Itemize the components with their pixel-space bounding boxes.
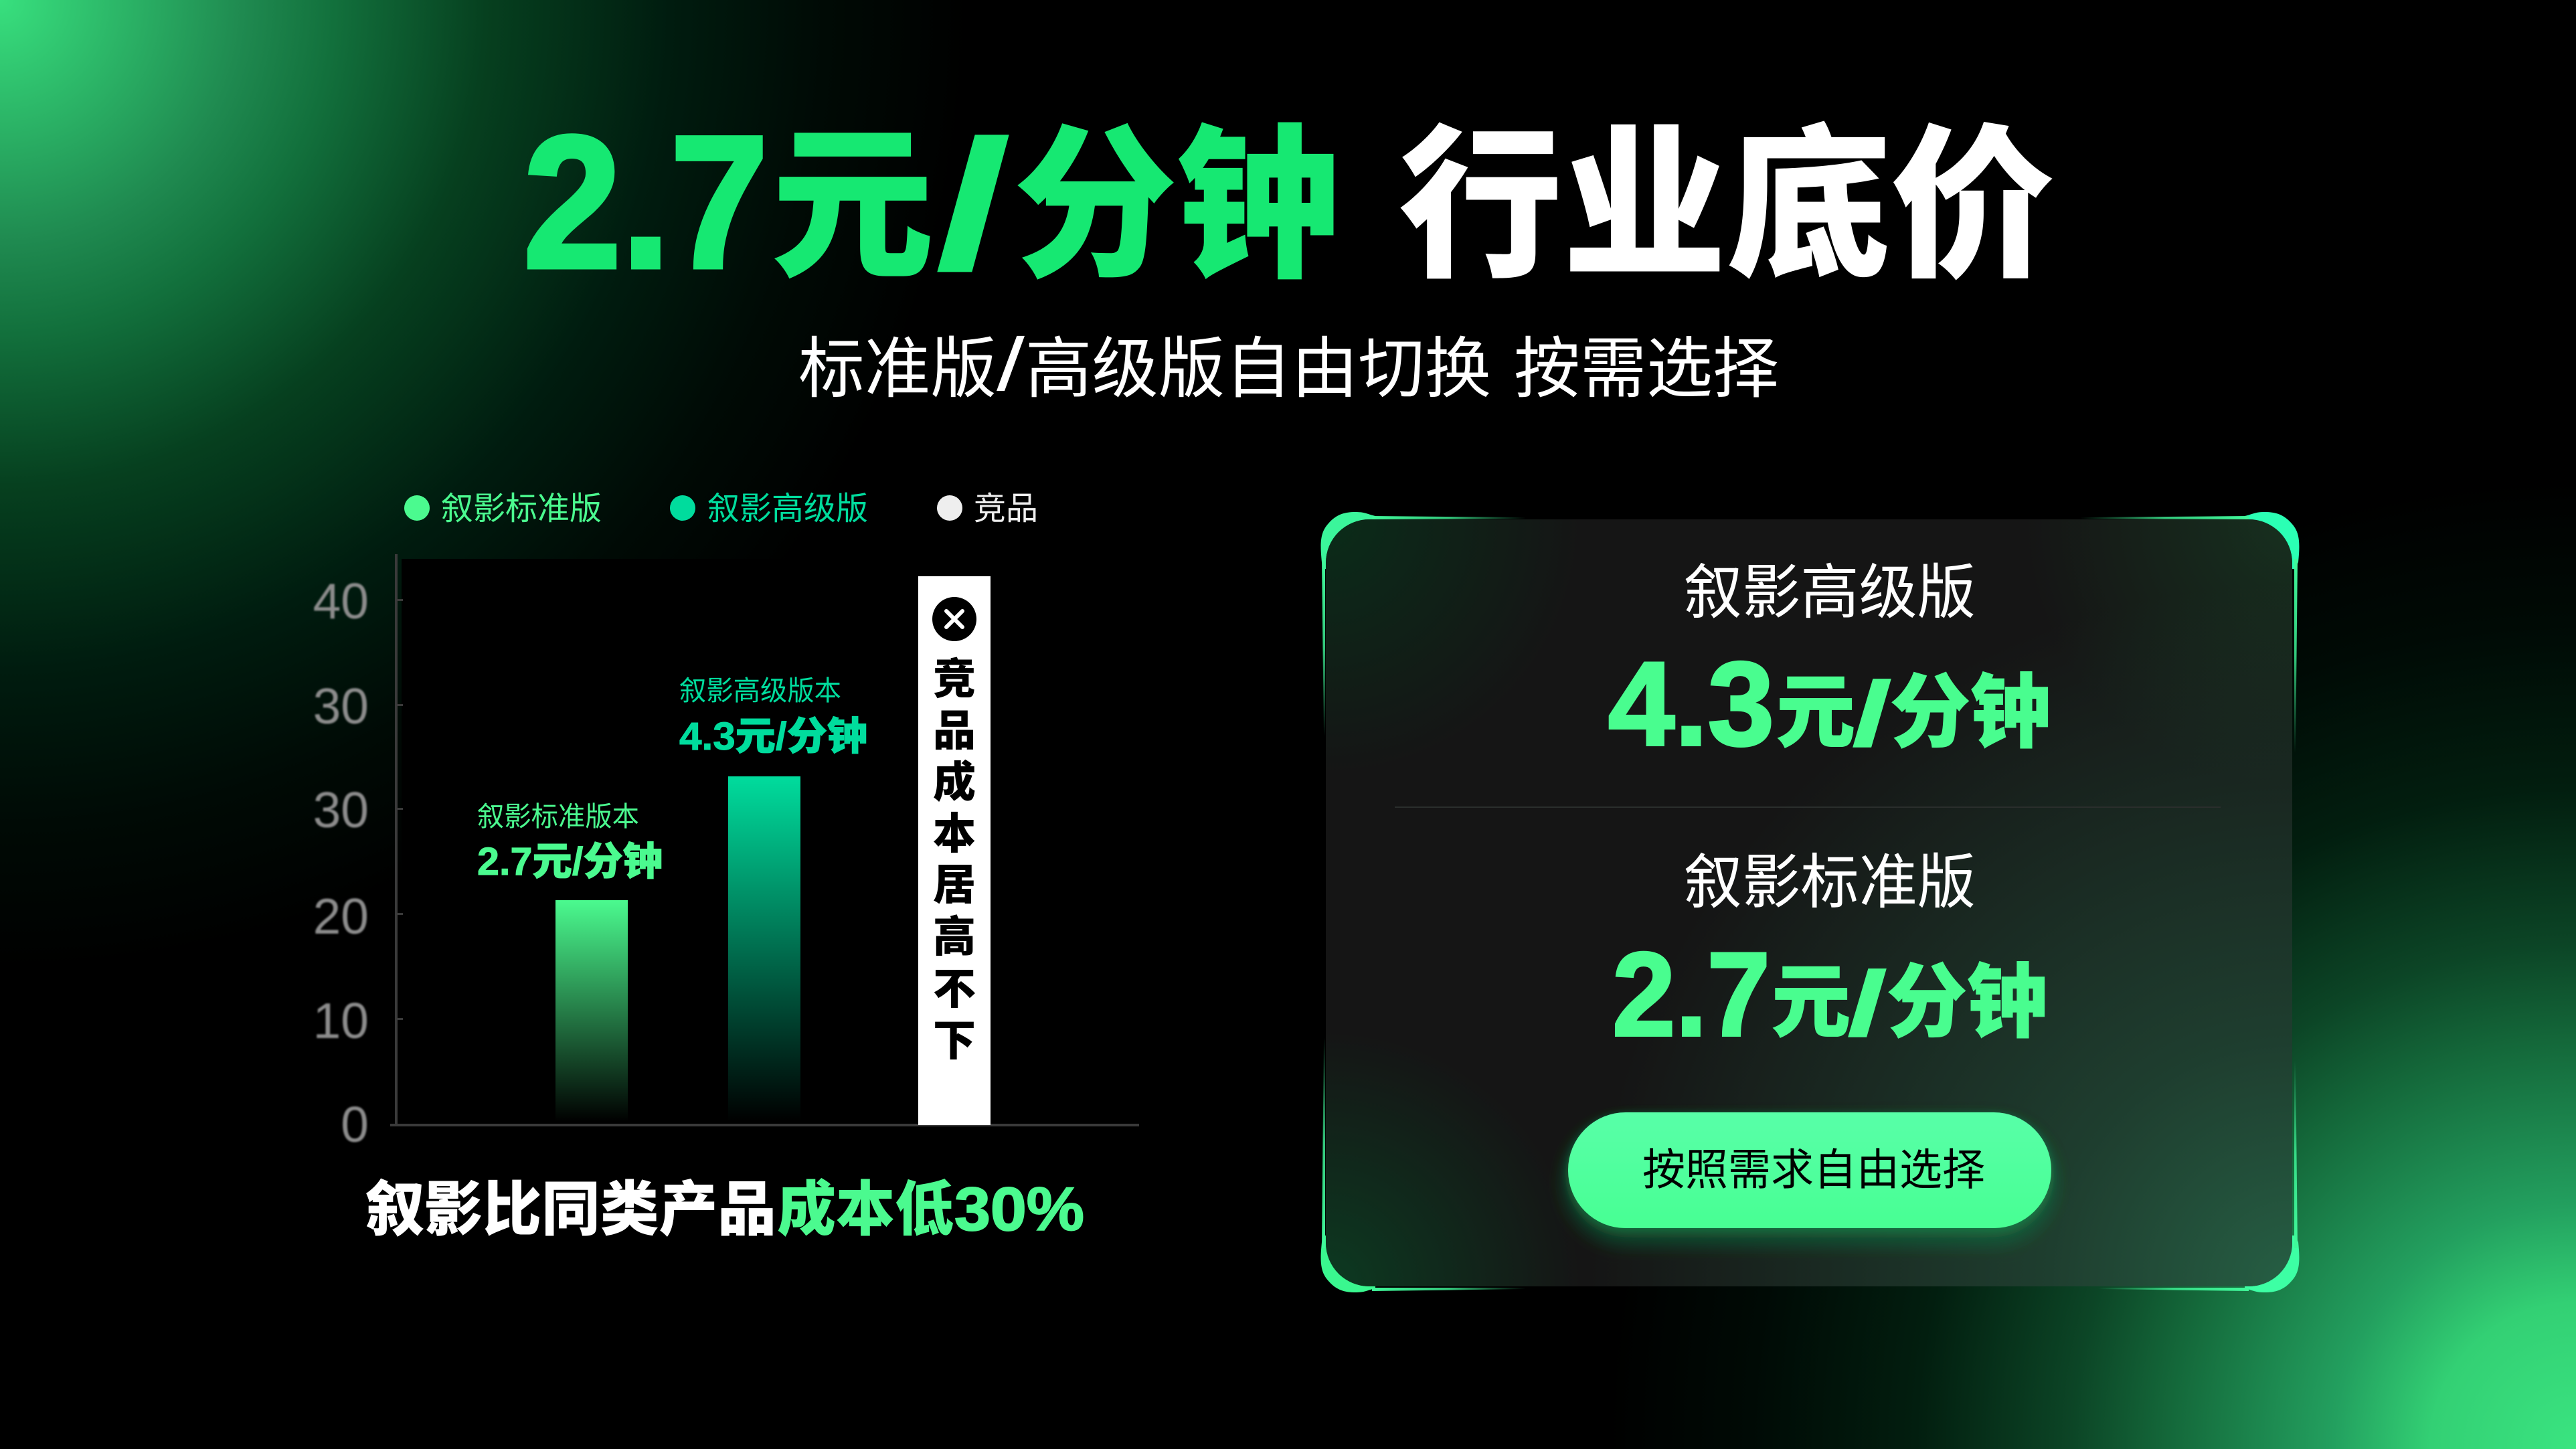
button: 按照需求自由选择 <box>1642 1145 1985 1194</box>
standard plan price: 2.7 <box>1612 928 1770 1061</box>
chart caption: 成本低 <box>777 1176 954 1243</box>
title: 分钟 <box>1014 114 1339 299</box>
bar: advanced <box>728 776 800 1122</box>
competitor vertical label: 竞 <box>933 655 976 703</box>
competitor vertical label: 下 <box>933 1017 976 1065</box>
divider <box>1395 806 2221 808</box>
legend item: standard: 叙影标准版 <box>441 491 602 527</box>
title: 元 <box>772 114 934 299</box>
advanced plan price: 4.3 <box>1608 637 1774 770</box>
bar: standard <box>555 900 628 1122</box>
card body <box>1326 519 2292 1286</box>
standard plan name: 叙影标准版 <box>1684 849 1976 916</box>
competitor vertical label <box>933 655 976 1065</box>
competitor vertical label: 高 <box>933 913 976 961</box>
standard plan price <box>1612 928 2047 1061</box>
y axis labels: 40 <box>313 573 369 629</box>
standard plan price: 元 <box>1772 958 1851 1047</box>
axes <box>390 554 1139 1126</box>
title: 2.7 <box>523 97 768 307</box>
chart caption: 30% <box>954 1175 1084 1244</box>
advanced plan name: 叙影高级版 <box>1684 559 1976 626</box>
chart caption: 叙影比同类产品 <box>365 1176 776 1243</box>
advanced plan price: 元 <box>1776 668 1855 758</box>
bar label: standard: 2.7元/分钟 <box>477 840 663 883</box>
bar label: standard <box>477 801 663 883</box>
subtitle: 高级版自由切换 <box>1025 331 1491 406</box>
competitor vertical label: 本 <box>933 810 976 858</box>
title <box>523 97 2055 307</box>
title: / <box>937 104 1010 306</box>
icon: x in circle <box>932 597 976 641</box>
subtitle <box>798 323 1779 406</box>
y axis labels <box>313 573 369 1153</box>
bar label: standard: 叙影标准版本 <box>477 801 639 832</box>
standard plan price: / <box>1848 953 1887 1054</box>
advanced plan price <box>1608 637 2051 770</box>
title: 行业底价 <box>1399 114 2055 299</box>
legend item: competitor <box>937 491 1038 527</box>
legend <box>404 491 1038 527</box>
card border corners <box>1321 512 2299 1292</box>
button <box>1568 1112 2051 1228</box>
y axis labels: 10 <box>313 993 369 1049</box>
bar label: advanced: 4.3元/分钟 <box>679 715 867 758</box>
legend item: advanced: 叙影高级版 <box>707 491 868 527</box>
bar label: advanced: 叙影高级版本 <box>679 675 841 706</box>
subtitle: / <box>997 323 1025 406</box>
legend item: competitor: 竞品 <box>974 491 1038 527</box>
subtitle: 按需选择 <box>1514 331 1779 406</box>
competitor vertical label: 居 <box>933 861 976 909</box>
y axis labels: 30 <box>313 782 369 838</box>
y axis labels: 20 <box>313 888 369 944</box>
bar chart <box>313 554 1139 1153</box>
competitor vertical label: 成 <box>933 758 976 806</box>
y axis labels: 0 <box>341 1096 369 1153</box>
competitor vertical label: 不 <box>933 965 976 1013</box>
competitor vertical label: 品 <box>933 707 976 755</box>
chart caption <box>365 1175 1084 1244</box>
advanced plan price: / <box>1853 663 1891 764</box>
subtitle: 标准版 <box>798 331 997 406</box>
bar label: advanced <box>679 675 867 758</box>
bar: competitor <box>918 576 991 1125</box>
panel: pricing card <box>1321 512 2299 1292</box>
y axis labels: 30 <box>313 678 369 734</box>
advanced plan price: 分钟 <box>1890 668 2051 758</box>
standard plan price: 分钟 <box>1887 958 2047 1047</box>
